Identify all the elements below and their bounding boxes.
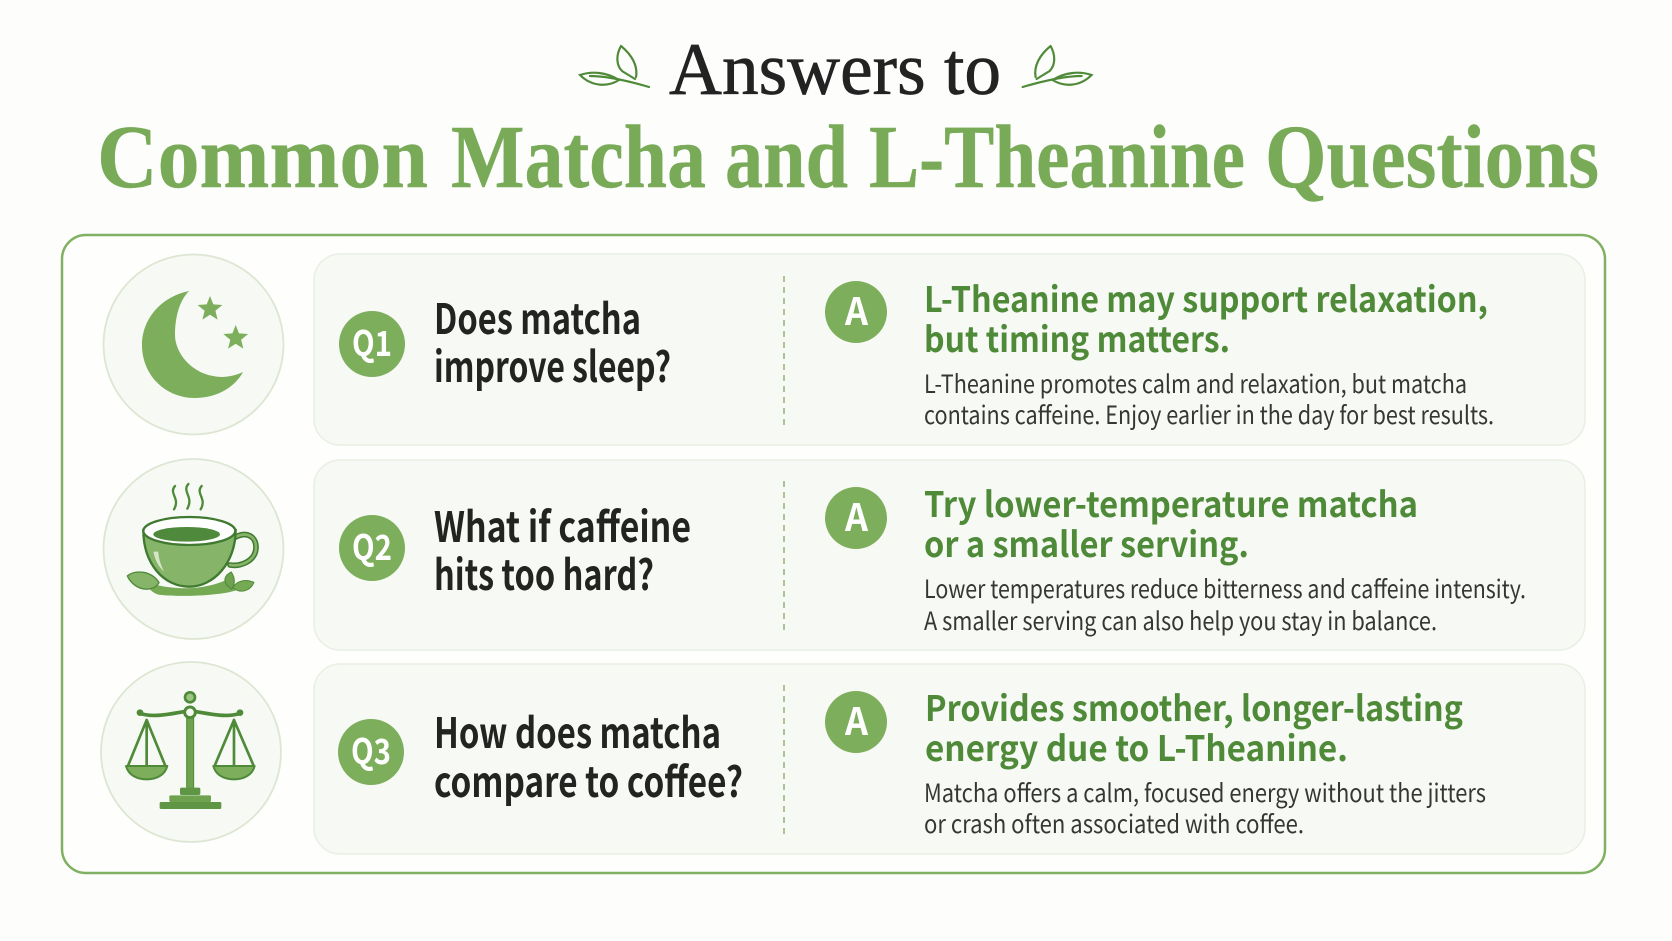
question 1 text: improve sleep? xyxy=(434,334,671,395)
leaf ornament left xyxy=(580,46,649,87)
answer 2 body: A smaller serving can also help you stay in balance. xyxy=(924,602,1437,638)
heading: Common Matcha and L-Theanine Questions: Matcha xyxy=(451,108,706,207)
answer 2 heading: or a smaller serving. xyxy=(924,517,1249,568)
answer 3 body xyxy=(924,774,1486,841)
answer 2 body xyxy=(924,570,1526,638)
card: question and answer 3 xyxy=(314,664,1585,854)
answer 1 body xyxy=(924,365,1494,432)
question 3 text: compare to coffee? xyxy=(434,749,743,810)
badge: A: A xyxy=(844,487,869,542)
badge: A xyxy=(825,281,887,343)
card: question and answer 2 xyxy=(314,460,1585,650)
question 3 text: How does matcha xyxy=(434,700,721,761)
answer 2 heading: Try lower-temperature matcha xyxy=(924,477,1418,528)
heading: Common Matcha and L-Theanine Questions: L-Theanine xyxy=(869,108,1245,207)
badge: A: A xyxy=(844,691,869,746)
row 3: coffee comparison xyxy=(101,662,1585,854)
heading: Common Matcha and L-Theanine Questions: Common xyxy=(97,108,428,207)
question 2 text: hits too hard? xyxy=(434,542,654,603)
badge: Q1: Q1 xyxy=(352,316,392,367)
badge: Q3 xyxy=(338,719,404,785)
answer 1 heading xyxy=(924,272,1488,363)
question 1 text: Does matcha xyxy=(434,286,641,347)
question 2 text: What if caffeine xyxy=(434,494,691,555)
answer 3 body: Matcha offers a calm, focused energy without the jitters xyxy=(924,774,1486,810)
icon: balance scale xyxy=(101,662,281,842)
outer frame panel xyxy=(62,235,1605,873)
answer 1 body: L-Theanine promotes calm and relaxation, but matcha xyxy=(924,365,1467,401)
heading: Common Matcha and L-Theanine Questions: Questions xyxy=(1265,108,1599,207)
leaf ornament right xyxy=(1023,46,1092,87)
badge: A: A xyxy=(844,281,869,336)
row 2: caffeine xyxy=(104,459,1585,650)
badge: Q2 xyxy=(339,515,405,581)
heading: Common Matcha and L-Theanine Questions: and xyxy=(725,108,848,207)
answer 3 heading: energy due to L-Theanine. xyxy=(925,721,1348,772)
answer 3 heading: Provides smoother, longer-lasting xyxy=(925,681,1463,732)
answer 2 heading xyxy=(924,477,1418,568)
badge: Q2: Q2 xyxy=(352,520,392,571)
badge: A xyxy=(825,487,887,549)
card: question and answer 1 xyxy=(314,254,1585,445)
question 1 text xyxy=(434,286,671,395)
heading: Answers to: Answers to xyxy=(669,29,1001,111)
question 2 text xyxy=(434,494,691,603)
badge: A xyxy=(825,691,887,753)
answer 1 heading: L-Theanine may support relaxation, xyxy=(924,272,1488,323)
answer 3 body: or crash often associated with coffee. xyxy=(924,805,1304,841)
badge: Q1 xyxy=(339,311,405,377)
icon: matcha cup xyxy=(104,459,284,639)
badge: Q3: Q3 xyxy=(351,724,391,775)
icon: moon and stars xyxy=(104,254,284,434)
answer 1 body: contains caffeine. Enjoy earlier in the day for best results. xyxy=(924,396,1494,432)
answer 2 body: Lower temperatures reduce bitterness and caffeine intensity. xyxy=(924,570,1526,606)
answer 1 heading: but timing matters. xyxy=(924,312,1230,363)
row 1: sleep xyxy=(104,254,1585,445)
answer 3 heading xyxy=(925,681,1463,772)
heading: Common Matcha and L-Theanine Questions xyxy=(97,108,1599,207)
question 3 text xyxy=(434,700,743,810)
